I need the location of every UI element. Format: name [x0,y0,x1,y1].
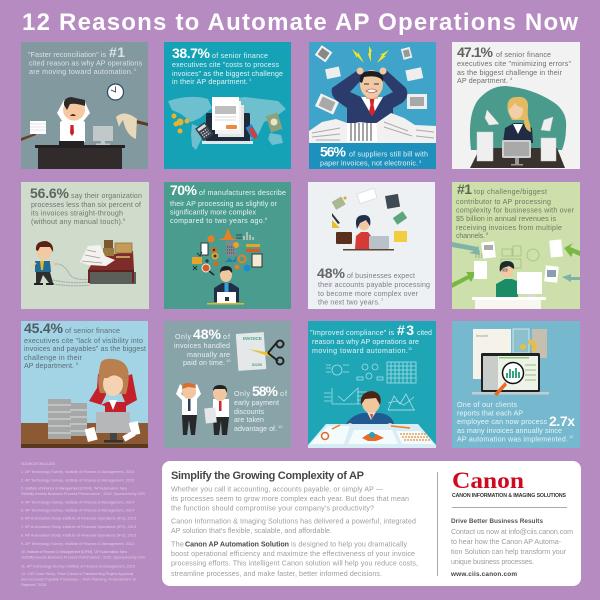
text: faster reconciliation: "Faster reconciliation" is [28,51,106,59]
text: 70 percent: 70% [170,182,198,198]
text block: body copy: Canon AP Automation Solution [185,540,289,548]
illustration: faded office background [476,246,539,268]
text: number 1 challenge: 8 [486,231,489,236]
illustration: desk with papers and boxes [80,240,136,284]
label: Canon Information and Imaging Solutions: CANON INFORMATION & IMAGING SOLUTIONS [452,493,567,499]
illustration: man at laptop [207,266,244,304]
icon cluster: business icons [192,228,262,275]
text: 38.7 percent: of senior finance [212,52,268,60]
heading: simplify: Simplify the Growing Complexity of AP [171,470,364,482]
text block: body copy [171,486,418,578]
text: 70 percent: of manufacturers describe [199,189,286,197]
band: bottom caption: paper invoices, not electronic. [320,160,418,168]
panel: faster reconciliation [21,42,148,169]
text: number 3 reason: reason as why AP operations are [312,338,419,346]
text block: contact: Contact us now at info@ciis.canon.com [451,528,573,536]
text: 2.7x: reports that each AP [457,410,523,418]
icon: lightning bolts [352,46,389,63]
text: only 48 percent: manually are [187,351,230,359]
illustration: man at dashboard desk [346,391,394,429]
sources list: SOURCES INCLUDE: [21,461,56,466]
text: faster reconciliation [28,44,142,76]
text block: body copy: boost operational efficiency and maximize the effectiveness of your invoice [171,550,415,558]
panel: minimizing errors [452,42,580,169]
text: 45.4 percent: executives cite "lack of visibility into [24,337,143,345]
text: 47.1 percent: executives cite "minimizing errors" [457,60,571,68]
text: only 58 percent: early payment [234,399,279,407]
text: 56.6 percent: (without any manual touch). [31,218,123,226]
text: number 1 challenge: contributor to AP processing [456,198,551,206]
illustration: woman with laptop and floating icons [332,188,407,250]
text: only 48 percent: paid on time. [183,359,225,367]
band: bottom caption: 56% [320,144,347,160]
text block: contact: to hear how the Canon AP Automa- [451,538,562,546]
sources list [21,461,145,587]
icon: invoices [474,239,563,283]
text block: body copy: The [171,540,184,548]
illustration: monitor [96,412,130,442]
sources list: and Accounts Payable Processes -- from Planning, Procurement, to [21,576,136,582]
band: bottom caption: 3 [419,159,422,164]
text: only 58 percent [234,383,287,433]
text: number 1 challenge: top challenge/biggest [474,188,547,196]
illustration: woman at desk [503,97,533,143]
icon: arrows toward invoices [452,242,580,288]
text: only 48 percent: 48% [193,326,222,342]
sources list: 5. AP Technology Survey, Institute of Finance & Management, 2014 [21,508,135,512]
text: number 3 reason: "Improved compliance" is [310,329,394,337]
text: only 58 percent: discounts [234,408,264,416]
text: 45.4 percent [24,320,146,370]
panel: multiple channels [452,181,580,309]
band: bottom caption [309,143,436,169]
icon: invoice and scissors [236,332,284,371]
text: 47.1 percent: 4 [510,76,513,81]
text: only 48 percent: Only [175,333,191,341]
text: 70 percent: significantly more complex [170,208,256,216]
panel: manual invoices and discounts [164,321,291,448]
text: only 58 percent: 10 [278,424,283,429]
icon: calculator [195,122,214,141]
text: 48 percent: 7 [381,297,384,302]
icon: invoice and scissors: $2295 [252,363,262,367]
panel: call to action card [162,461,581,586]
illustration: woman at computer desk [472,261,546,309]
text: 47.1 percent: as the biggest challenge in their [457,69,563,77]
text: 45.4 percent: AP department. [24,362,74,370]
text: number 1 challenge: channels. [456,232,485,240]
text: 45.4 percent: 45.4% [24,320,64,336]
text: only 48 percent [174,326,231,367]
sources list: 11. AP Technology Survey, Institute of Finance & Management, 2015 [21,564,135,568]
text: 2.7x: AP automation was implemented. [457,436,568,444]
text: 48 percent: the next two years. [318,298,380,306]
text block: contact: tion Solution can help transform your [451,548,567,556]
panel: lack of visibility [21,320,148,448]
text: 56.6 percent [30,185,142,226]
text: only 58 percent: 58% [252,383,279,399]
text: 38.7 percent: executives cite "costs to process [172,61,279,69]
illustration: world map [168,97,286,150]
illustration: dark desk [470,148,565,168]
text: 2.7x: 12 [569,434,574,439]
text block: contact [450,518,573,578]
sources list: 10. Institute of Finance & Management (IOFM), "AP Automation: New [21,549,127,554]
text: only 48 percent: of [223,333,230,341]
sources list: 2. AP Technology Survey, Institute of Finance & Management, 2015 [21,478,134,482]
illustration: invoice papers and coins: Invoice [476,334,488,338]
text: 38.7 percent: in their AP department. [172,78,248,86]
icon: wall clock [108,84,124,100]
sources list: 7. AP Automation Study, Institute of Financial Operations (IFO), 2013 [21,524,136,529]
text: 48 percent: their accounts payable processing [318,281,430,289]
sources list: Visibility Boosts Business Process Performance", 2015, Sponsored by CIIS [21,554,145,560]
text: faster reconciliation: #1 [109,44,125,60]
logo: Canon: Canon [452,468,524,493]
text block: body copy: Canon Information & Imaging Solutions has delivered a powerful, integrated [171,518,416,526]
text block: body copy: AP solution that's flexible, scalable, and affordable. [171,527,332,535]
illustration: hand with paper scroll [116,113,148,139]
text: 56.6 percent: say their organization [71,192,142,200]
icon: banknotes [266,113,282,132]
text: 48 percent [317,265,430,306]
sources list: Visibility Boosts Business Process Performance", 2015, Sponsored by CIIS [21,491,145,496]
text: 2.7x: One of our clients [457,401,517,409]
icon: credit cards [246,124,259,140]
text: 70 percent: 6 [265,216,268,221]
text: 47.1 percent: 47.1% [457,44,494,60]
text: 56.6 percent: 56.6% [30,185,70,201]
panel: improved compliance [308,321,436,448]
text: only 58 percent: are taken [234,416,264,424]
panel: 2.7x clients [452,321,580,448]
text block: body copy: the function should compromise your company's productivity? [171,504,374,512]
illustration: two worried businessmen [176,383,229,435]
illustration: laptop with magnifier [472,353,549,396]
text: 47.1 percent: of senior finance [496,51,551,59]
band: bottom caption: of suppliers still bill with [349,150,428,158]
text: number 1 challenge: #1 [457,181,472,197]
illustration: paper stacks [477,110,556,161]
text: 45.4 percent: 9 [76,361,79,366]
text: faster reconciliation: 2 [134,67,137,72]
text: number 1 challenge: complexity for businesses with over [456,206,575,214]
illustration: stressed man at desk [35,97,125,169]
text: 47.1 percent: AP department. [457,77,508,85]
text: 48 percent: of businesses expect [347,272,415,280]
illustration: chained man [30,241,56,285]
text: 2.7x: employee can now process [457,418,547,426]
text: 45.4 percent: challenge in their [24,354,83,362]
text: only 58 percent: of [280,390,287,398]
text: 2.7x: as many invoices annually since [457,427,562,435]
text block: contact: unique business processes. [451,558,534,566]
text block: contact: www.ciis.canon.com [450,571,517,578]
text: 70 percent: compared to two years ago. [170,217,265,225]
text block: body copy: streamline processes, and make faster, better informed decisions. [171,570,382,578]
icon: invoice and scissors: INVOICE [243,336,263,342]
illustration: brown desk [21,423,148,448]
text: number 3 reason: #3 [397,322,414,338]
text: 45.4 percent: of senior finance [65,327,120,335]
text: number 3 reason: cited [417,329,432,337]
text: 70 percent [170,182,286,225]
illustration: paper stacks [48,399,87,439]
text: 38.7 percent: invoices" as the biggest challenge [172,70,283,78]
text block: body copy: its processes seem to grow more complex each year. But does that mean [171,495,409,503]
illustration: stressed woman [89,359,137,413]
illustration: laptop with invoices [202,97,253,144]
sources list: 8. AP Automation Study, Institute of Financial Operations (IFO), 2015 [21,532,136,538]
sources list: 9. AP Technology Survey, Institute of Finance & Management, 2014 [21,541,135,546]
text: faster reconciliation: are moving toward automation. [29,68,133,76]
text: 38.7 percent [172,45,283,86]
text: 2.7x [457,401,575,444]
illustration: chains [53,264,90,286]
illustration: monitor [502,140,531,166]
text: only 48 percent: invoices handled [174,342,230,350]
text: faster reconciliation: cited reason as why AP operations [29,60,142,68]
panel: manufacturers complexity [164,182,291,309]
text: number 1 challenge: receiving invoices from multiple [456,224,562,232]
sources list: 6. AP Automation Study, Institute of Financial Operations (IFO), 2013 [21,516,136,520]
text: number 1 challenge [456,181,575,240]
sources list: 3. Institute of Finance & Management (IOFM), "AP Automation: New [21,486,127,490]
panel: accounts payable complexity [308,182,435,309]
illustration: hand with papers [21,121,46,141]
icon: gold coins [172,114,190,134]
text: only 58 percent: advantage of. [234,425,277,433]
illustration: paper pile [309,113,436,143]
illustration: teal blob [470,86,566,150]
sources list: Payment," 2015. [21,582,47,587]
text: 45.4 percent: invoices and payables" as the biggest [24,345,146,353]
illustration: flying papers [315,45,427,115]
text: 56.6 percent: 5 [123,217,126,222]
sources list: 1. AP Technology Survey, Institute of Finance & Management, 2014 [21,469,135,474]
sources list: 4. AP Technology Survey, Institute of Finance & Management, 2014 [21,500,135,504]
text: 48 percent: 48% [317,265,346,281]
panel: straight-through processing [21,182,149,309]
text: number 3 reason: 11 [408,346,413,351]
text: number 3 reason: moving toward automation. [312,347,408,355]
text: number 3 reason [310,322,432,355]
text: 70 percent: their AP processing as slightly or [170,200,278,208]
illustration: dashboard sheets [308,424,436,448]
sources list: 12. CIIS Case Study, "How Canon is Transforming Project Approval [21,571,133,576]
text: only 48 percent: 10 [226,358,231,363]
text: number 1 challenge: $5 billion in annual revenues is [456,215,556,223]
chart icons: process diagrams [324,362,416,410]
text block: contact: Drive Better Business Results [451,518,543,525]
text: only 58 percent: Only [234,390,250,398]
text block: body copy: is designed to help you dramatically [291,540,407,548]
text: 56.6 percent: processes less than six percent of [31,201,141,209]
text: 38.7 percent: 1 [249,77,252,82]
illustration: scattered invoices [85,421,140,442]
panel: paper invoices [309,42,436,169]
title: 12 Reasons to Automate AP Operations Now [22,9,578,36]
text: 48 percent: to become more complex over [318,290,419,298]
illustration: man in suit [332,68,407,126]
text: 2.7x: 2.7x [549,413,575,429]
text: 38.7 percent: 38.7% [172,45,211,61]
panel: costs to process invoices [164,42,291,169]
text: 47.1 percent [457,44,571,85]
text block: body copy: processing efforts. This intelligent Canon solution will help you reduce costs, [171,560,418,568]
text: 56.6 percent: its invoices straight-through [31,210,123,218]
text block: body copy: Whether you call it accounting, accounts payable, or simply AP — [171,486,384,494]
